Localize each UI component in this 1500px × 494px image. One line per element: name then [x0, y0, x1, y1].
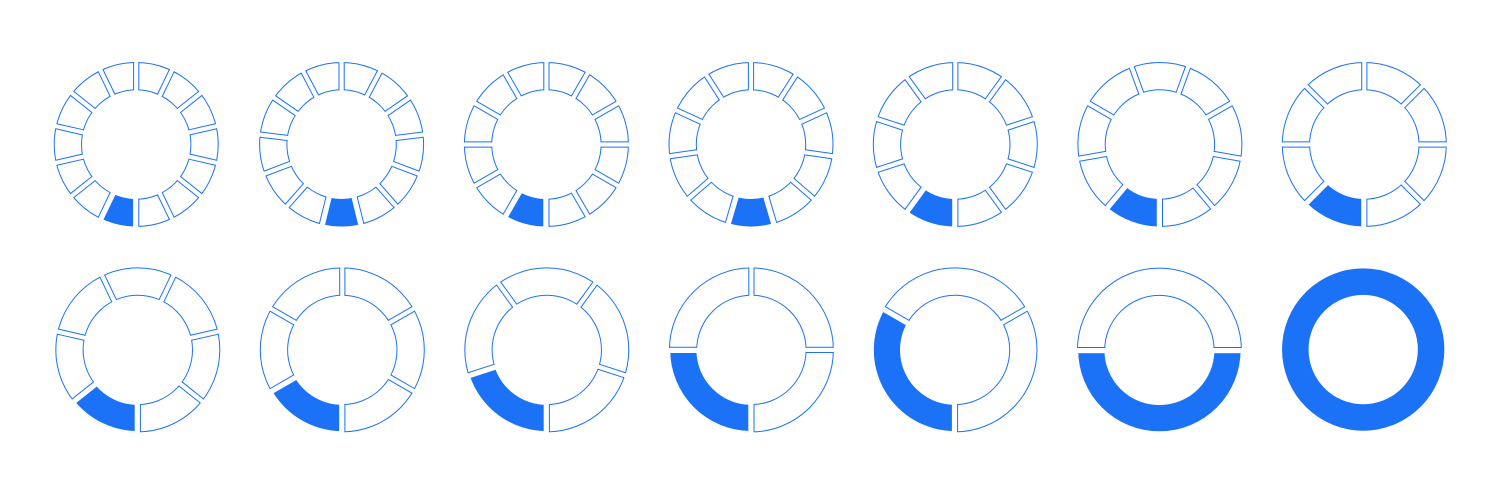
donut ring: 5 segments, 1 filled	[462, 268, 629, 440]
donut ring: 14 segments, 1 filled	[52, 58, 221, 234]
filled segment	[470, 367, 547, 431]
donut ring: 9 segments, 1 filled	[1075, 62, 1245, 234]
donut ring: 7 segments, 1 filled	[53, 268, 222, 440]
filled segment	[1107, 186, 1160, 226]
donut ring: 3 segments, 1 filled	[873, 268, 1037, 440]
donut ring: 10 segments, 1 filled	[873, 58, 1038, 234]
donut ring: 2 segments, 1 filled	[1069, 268, 1249, 432]
donut ring: 11 segments, 1 filled	[666, 58, 836, 232]
filled segment	[322, 197, 361, 226]
filled segment	[272, 377, 342, 431]
donut ring: 13 segments, 1 filled	[256, 58, 427, 233]
donut ring: 8 segments, 1 filled	[1278, 58, 1450, 234]
filled segment	[907, 189, 955, 226]
filled segment	[1306, 183, 1364, 226]
filled segment	[505, 192, 546, 226]
donut ring: 12 segments, 1 filled	[460, 58, 632, 234]
filled segment	[1078, 350, 1241, 431]
filled segment	[670, 350, 751, 431]
donut ring: 4 segments, 1 filled	[661, 264, 837, 440]
filled segment	[101, 194, 136, 226]
filled segment	[74, 384, 138, 431]
donut ring: 6 segments, 1 filled	[260, 264, 424, 440]
filled segment	[874, 309, 955, 431]
filled segment	[728, 197, 774, 227]
donut ring: fully filled	[1295, 282, 1431, 417]
